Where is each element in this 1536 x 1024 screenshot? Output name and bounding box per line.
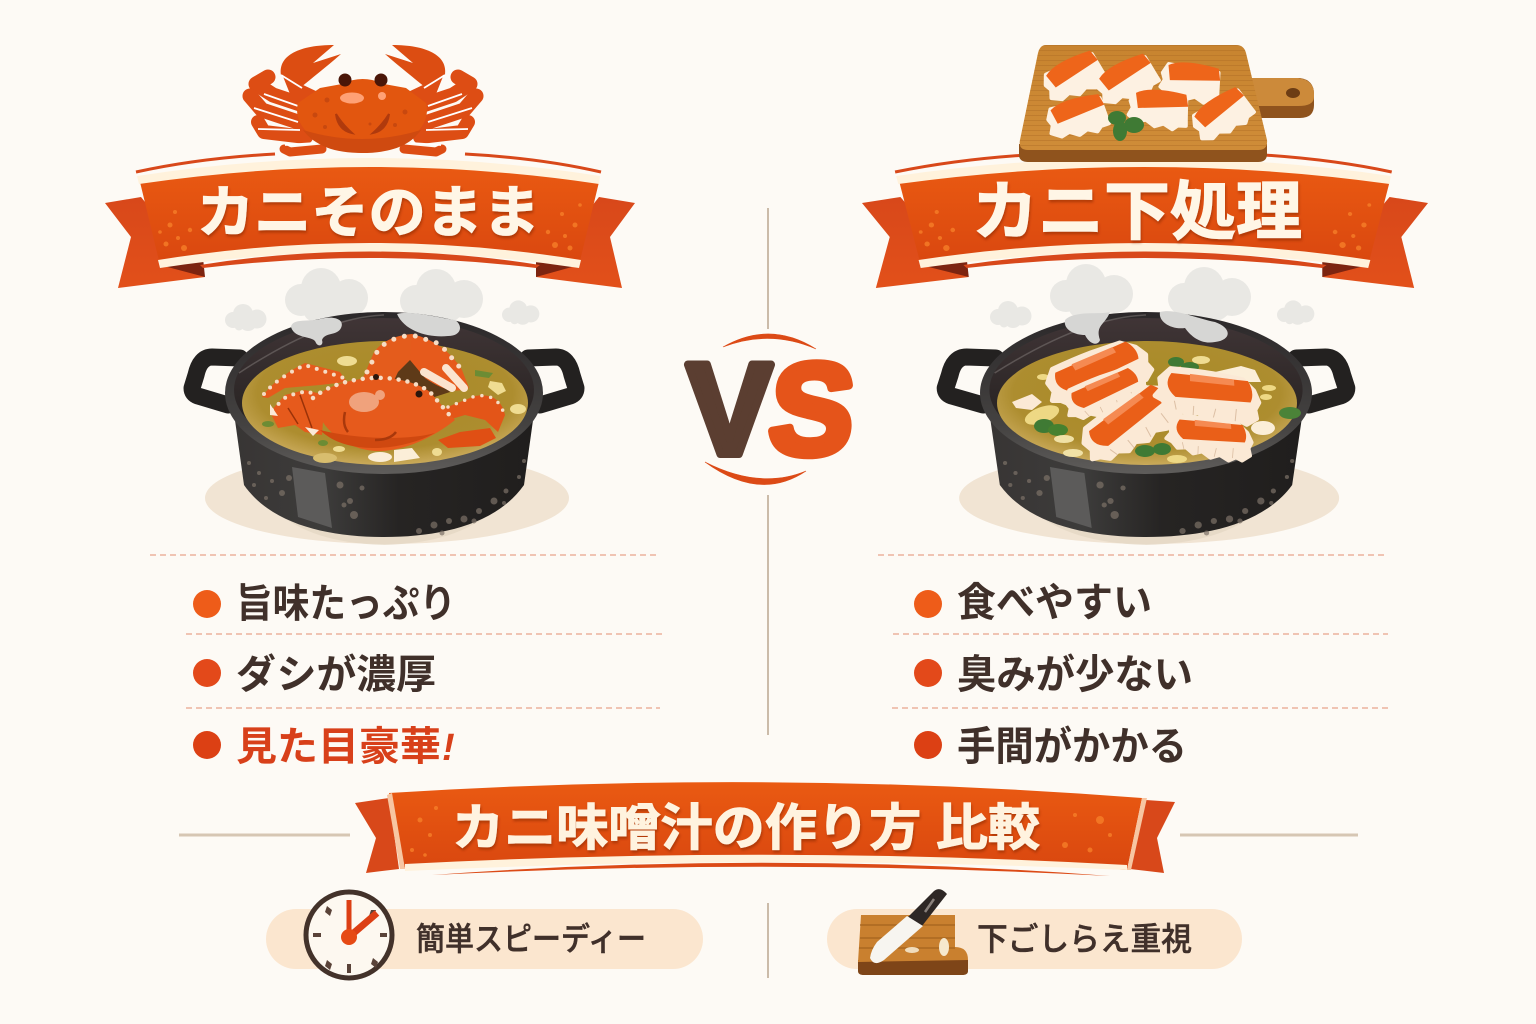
side rules beside bottom banner	[179, 834, 1358, 836]
VS emblem	[687, 334, 861, 485]
list: カニ下処理 merits	[914, 581, 1193, 769]
item: 見た目豪華！: !	[442, 727, 455, 769]
vegetables and herbs	[1012, 356, 1301, 463]
banner: カニ下処理	[862, 154, 1428, 288]
steam: left pot front wisps	[291, 313, 460, 345]
soup	[997, 341, 1297, 465]
whole crab in pot	[262, 334, 505, 451]
list: カニそのまま merits	[193, 582, 456, 769]
pot: crab pieces soup	[946, 312, 1346, 545]
pill: 簡単スピーディー	[266, 892, 703, 978]
banner: カニそのまま	[105, 154, 635, 288]
icon: cutting board and knife	[858, 889, 968, 975]
item: 臭みが少ない: 臭みが少ない	[957, 653, 1193, 697]
illustration: whole crab	[250, 45, 476, 153]
banner: カニ下処理: カニ下処理	[972, 176, 1302, 248]
pill: 下ごしらえ重視	[827, 889, 1242, 975]
item: 見た目豪華！: 見た目豪華	[236, 725, 441, 769]
pill: 下ごしらえ重視: 下ごしらえ重視	[977, 921, 1192, 957]
steam: left pot back	[225, 268, 539, 331]
steam: right pot back	[990, 264, 1314, 328]
dashed separators	[150, 555, 1392, 708]
pill: 簡単スピーディー: 簡単スピーディー	[416, 921, 646, 957]
item: 手間がかかる: 手間がかかる	[957, 725, 1187, 769]
VS emblem: V	[687, 336, 772, 482]
item: 旨味たっぷり: 旨味たっぷり	[236, 582, 456, 626]
bottom banner: カニ味噌汁の作り方 比較: カニ味噌汁の作り方 比較	[452, 800, 1040, 856]
soup	[242, 341, 528, 465]
bottom banner: カニ味噌汁の作り方 比較	[355, 782, 1175, 876]
steam: right pot front wisps	[1065, 311, 1228, 344]
vegetables	[262, 356, 526, 463]
item: ダシが濃厚: ダシが濃厚	[236, 653, 436, 697]
icon: clock	[306, 892, 392, 978]
pot: whole crab soup	[192, 312, 576, 545]
item: 食べやすい: 食べやすい	[957, 581, 1152, 625]
banner: カニそのまま: カニそのまま	[197, 181, 540, 244]
illustration: cutting board with crab pieces	[1019, 45, 1314, 162]
centre divider lines	[767, 208, 769, 978]
VS emblem: S	[764, 336, 861, 482]
